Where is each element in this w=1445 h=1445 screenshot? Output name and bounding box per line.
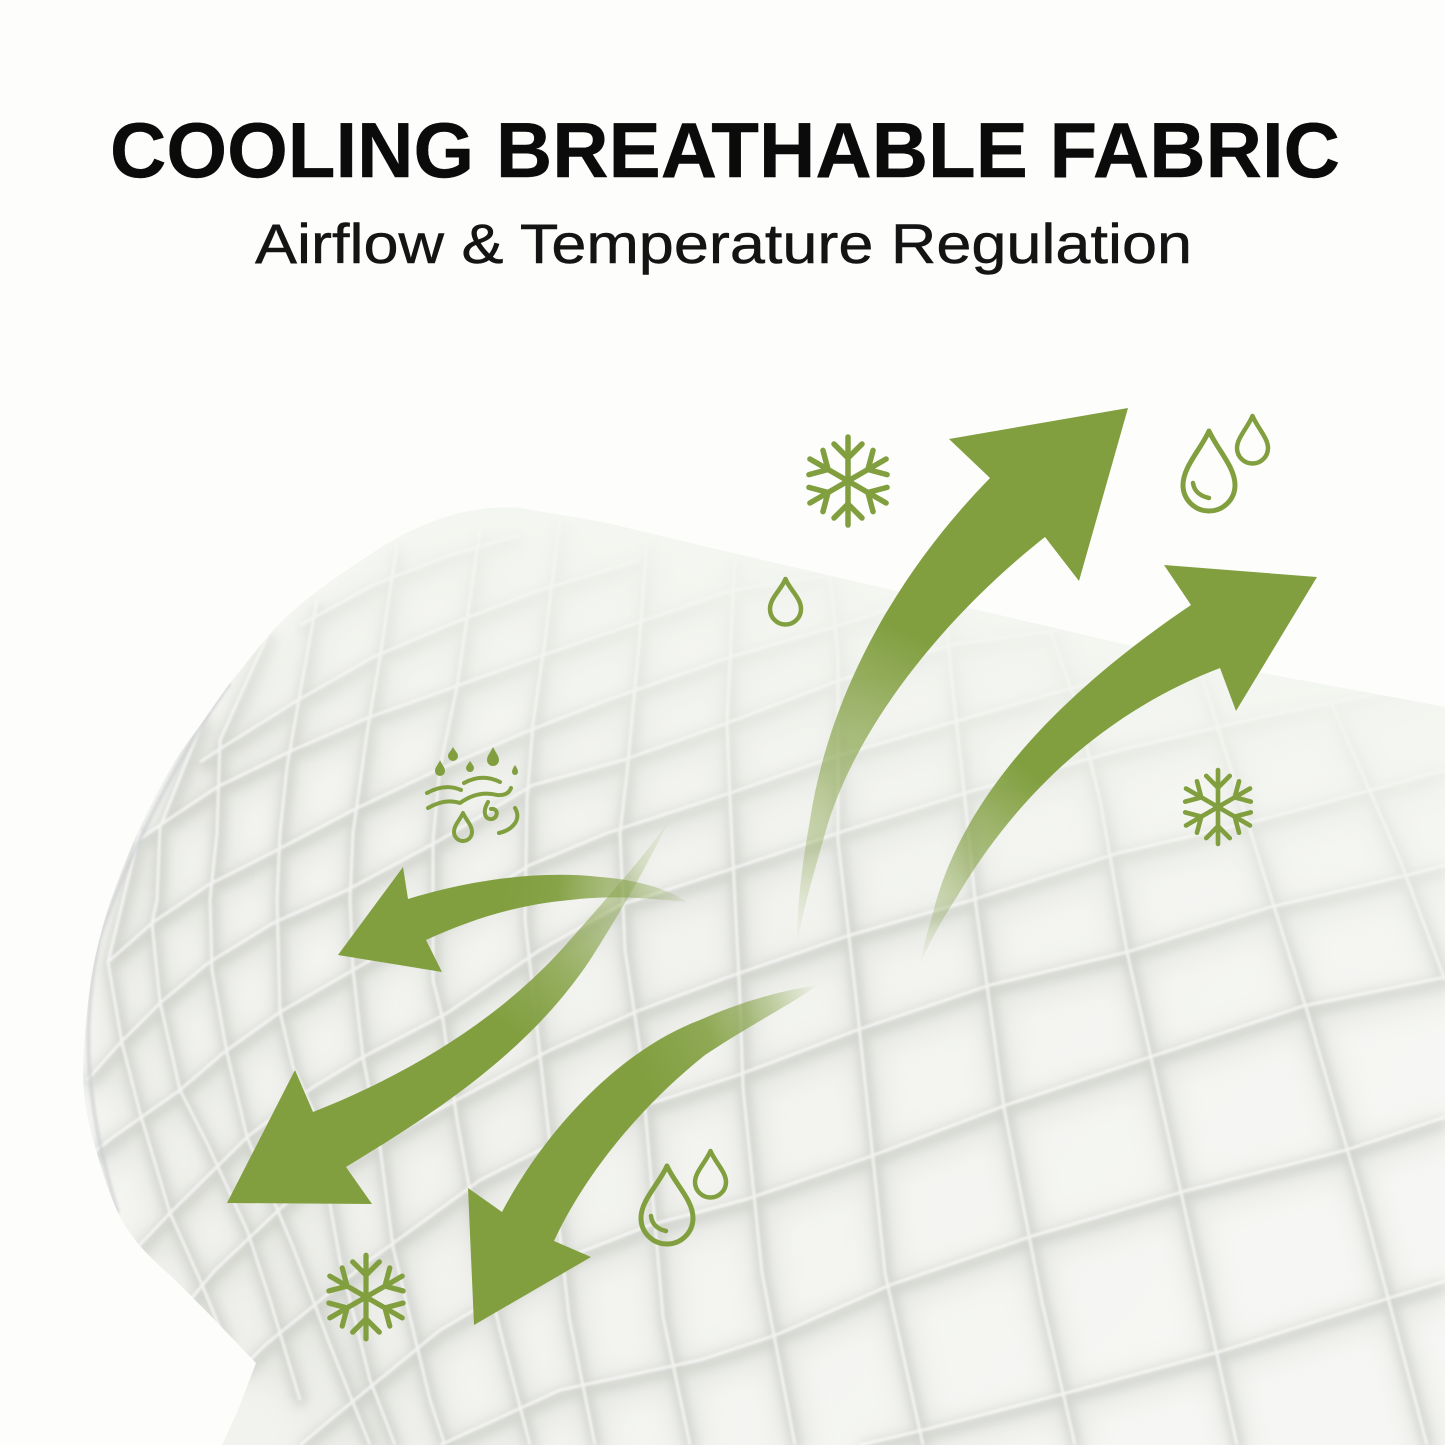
arrow: right upward airflow: [920, 565, 1317, 965]
quilted white pillow: [83, 508, 1445, 1445]
icon: moisture wicking: [427, 747, 518, 841]
arrow: big upward airflow: [797, 408, 1128, 945]
icon: snowflake bottom: [323, 1255, 409, 1339]
arrow: lower-centre airflow: [468, 985, 818, 1325]
icon: water drops top right: [1183, 416, 1268, 511]
title: COOLING BREATHABLE FABRIC: [110, 106, 1340, 194]
arrow: big lower-left airflow: [227, 822, 668, 1204]
icon: water drops lower: [641, 1151, 726, 1244]
subtitle: Airflow & Temperature Regulation: [255, 212, 1192, 275]
icon: single water drop: [770, 579, 801, 624]
icon: snowflake right: [1180, 770, 1256, 844]
arrow: small left airflow: [338, 867, 687, 972]
icon: snowflake top: [803, 437, 893, 525]
